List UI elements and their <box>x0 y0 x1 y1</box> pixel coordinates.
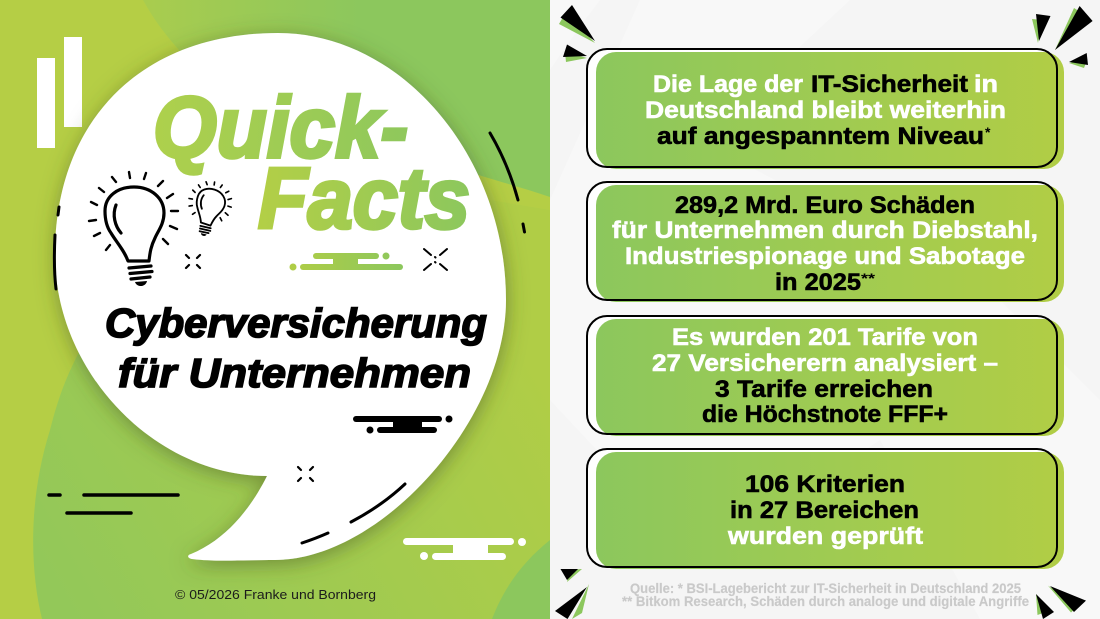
speech bubble <box>55 33 506 561</box>
box 2 <box>587 182 1064 302</box>
box 3 <box>587 316 1064 436</box>
box 1: auf angespanntem Niveau <box>657 123 984 150</box>
box 2: 289,2 Mrd. Euro Schäden <box>675 192 975 219</box>
box 3: 27 Versicherern analysiert – <box>652 350 998 377</box>
spikes top right <box>1032 6 1093 68</box>
box 1: IT-Sicherheit <box>811 71 968 98</box>
green cloud decoration <box>290 252 403 270</box>
title: Quick-Facts: Facts <box>258 151 470 247</box>
box 4: wurden geprüft <box>727 523 923 550</box>
title: Quick-Facts: Quick- <box>153 80 408 176</box>
sparkle near bulbs <box>186 255 200 268</box>
source note <box>622 581 1029 609</box>
icon: large light bulb <box>89 172 178 286</box>
title: Quick-Facts <box>153 80 470 247</box>
white cloud decoration <box>403 538 526 560</box>
box 4: in 27 Bereichen <box>730 497 919 524</box>
source note: ** Bitkom Research, Schäden durch analoge und digitale Angriffe <box>622 594 1029 609</box>
box 3: Es wurden 201 Tarife von <box>672 324 978 351</box>
box 1: Deutschland bleibt weiterhin <box>645 97 1006 124</box>
box 2: ** <box>861 270 876 286</box>
sparkle in bubble tail <box>298 467 313 481</box>
box 2: in 2025 <box>775 269 861 296</box>
box 1: * <box>985 124 991 140</box>
box 2: Industriespionage und Sabotage <box>625 243 1025 270</box>
box 2: für Unternehmen durch Diebstahl, <box>612 217 1038 244</box>
box 4 <box>587 449 1064 569</box>
spikes bottom left <box>555 569 589 619</box>
box 1: Die Lage der <box>653 71 803 98</box>
box 3: die Höchstnote FFF+ <box>702 401 948 428</box>
subtitle: für Unternehmen <box>118 350 471 396</box>
black cloud decoration <box>353 416 452 434</box>
logo bars <box>37 37 82 148</box>
subtitle: Cyberversicherung <box>105 300 487 346</box>
subtitle <box>105 300 487 396</box>
black dashes lower left <box>49 495 178 513</box>
spikes top left <box>559 5 595 62</box>
box 3: 3 Tarife erreichen <box>715 376 933 403</box>
panel: right background <box>550 0 1100 619</box>
spikes bottom right <box>1036 586 1086 619</box>
icon: small light bulb <box>179 176 237 241</box>
panel: left green background <box>0 0 550 619</box>
box 1: in <box>974 71 998 98</box>
box 4: 106 Kriterien <box>745 471 905 498</box>
bubble edge dashes <box>54 133 525 543</box>
box 1 <box>587 49 1064 169</box>
source note: Quelle: * BSI-Lagebericht zur IT-Sicherheit in Deutschland 2025 <box>630 581 1021 596</box>
sparkle near title <box>424 249 447 270</box>
copyright: © 05/2026 Franke und Bornberg <box>175 587 376 602</box>
